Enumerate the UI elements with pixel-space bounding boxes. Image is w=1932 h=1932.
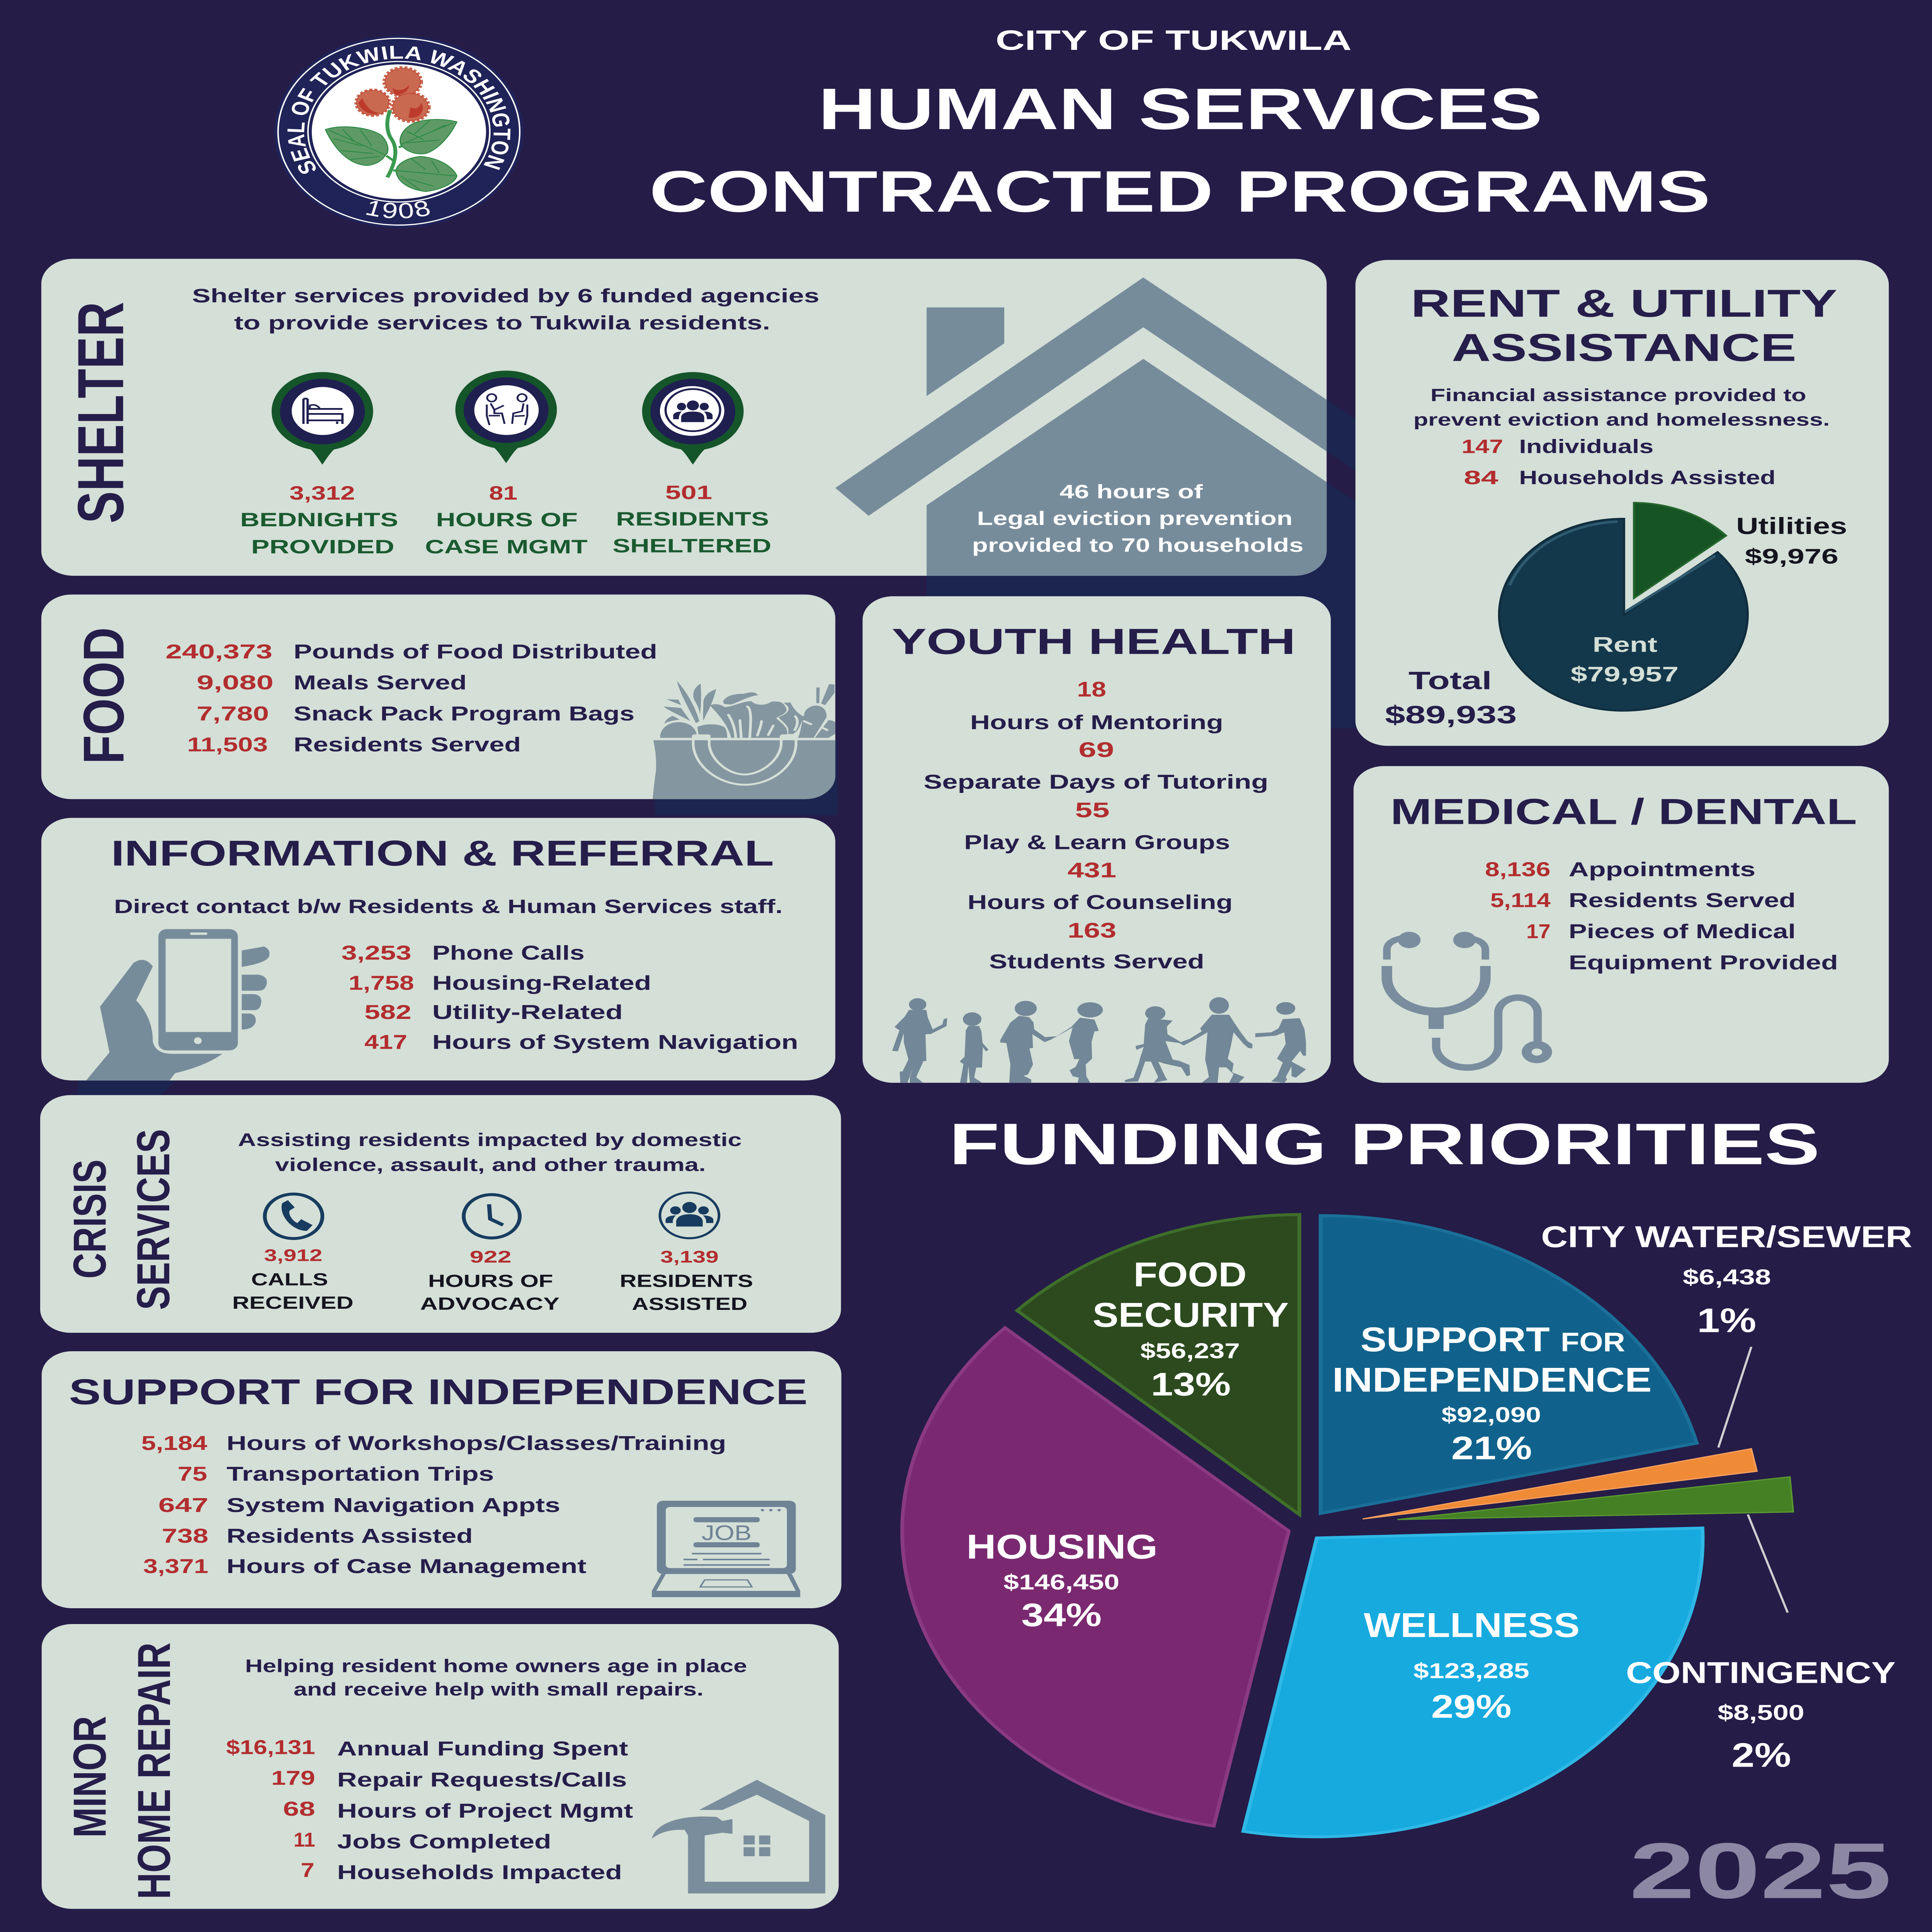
label: utilities: Utilities xyxy=(1736,513,1847,539)
rent intro text: Financial assistance provided to xyxy=(1430,385,1806,405)
slice: support for independence: 21% xyxy=(1451,1430,1532,1466)
stat: bednights: PROVIDED xyxy=(251,536,395,558)
heading: information and referral: INFORMATION & REFERRAL xyxy=(111,833,774,873)
icon: grocery bag xyxy=(653,681,835,799)
icon: house and hammer xyxy=(652,1780,825,1893)
icon: case management pin xyxy=(455,371,557,463)
food stats: 7,780 xyxy=(197,702,269,725)
medical stats: 17 xyxy=(1526,920,1551,942)
stat: residents assisted xyxy=(620,1247,753,1314)
youth health stats: Hours of Counseling xyxy=(968,891,1233,913)
label: city water and sewer: CITY WATER/SEWER xyxy=(1541,1220,1912,1254)
food stats xyxy=(165,640,657,756)
heading: medical and dental: MEDICAL / DENTAL xyxy=(1390,792,1857,832)
icon: residents group xyxy=(660,1192,719,1238)
label: total: $89,933 xyxy=(1385,701,1517,729)
support stats: Hours of Case Management xyxy=(226,1555,587,1577)
heading: funding priorities: FUNDING PRIORITIES xyxy=(949,1111,1820,1177)
medical stats: 5,114 xyxy=(1490,889,1551,912)
heading: crisis services: CRISIS xyxy=(64,1160,116,1279)
food stats: 9,080 xyxy=(197,671,274,694)
youth health stats: Separate Days of Tutoring xyxy=(923,770,1268,793)
minor repair stats: Hours of Project Mgmt xyxy=(337,1799,633,1822)
youth health stats: Hours of Mentoring xyxy=(970,711,1223,733)
crisis intro text xyxy=(238,1130,742,1175)
food stats: Snack Pack Program Bags xyxy=(294,702,634,725)
slice: housing: 34% xyxy=(1021,1596,1102,1633)
stat: residents sheltered xyxy=(612,482,771,557)
pie chart: rent and utilities: $79,957 xyxy=(1571,663,1679,686)
slice: food security: SECURITY xyxy=(1092,1295,1289,1334)
panel: information and referral xyxy=(41,818,835,1080)
minor repair intro text: Helping resident home owners age in place xyxy=(245,1656,747,1676)
information stats: 1,758 xyxy=(349,972,414,994)
medical stats xyxy=(1485,858,1838,974)
slice: support for independence xyxy=(1321,1216,1697,1514)
support stats: 3,371 xyxy=(143,1555,208,1577)
medical stats: Equipment Provided xyxy=(1569,951,1838,974)
heading: youth health: YOUTH HEALTH xyxy=(892,622,1296,662)
legal eviction callout: provided to 70 households xyxy=(972,535,1304,556)
heading: support for independence: SUPPORT FOR INDEPENDENCE xyxy=(69,1372,808,1412)
icon: clock xyxy=(464,1195,520,1238)
stat: calls received xyxy=(232,1246,354,1313)
slice: city water and sewer xyxy=(1362,1449,1757,1519)
icon: phone xyxy=(265,1194,322,1238)
slice: housing: $146,450 xyxy=(1003,1570,1119,1594)
support stats: System Navigation Appts xyxy=(226,1494,560,1516)
medical stats: Appointments xyxy=(1569,858,1755,881)
rent stats: Households Assisted xyxy=(1519,467,1776,488)
crisis intro text: violence, assault, and other trauma. xyxy=(275,1155,706,1175)
heading: crisis services: SERVICES xyxy=(128,1129,179,1310)
slice: food security: 13% xyxy=(1151,1366,1231,1403)
heading: food: FOOD xyxy=(71,627,136,764)
slice: wellness: WELLNESS xyxy=(1364,1605,1580,1644)
slice: housing xyxy=(902,1328,1289,1826)
minor repair intro text: and receive help with small repairs. xyxy=(294,1679,704,1699)
crisis intro text: Assisting residents impacted by domestic xyxy=(238,1130,742,1150)
label: total: Total xyxy=(1408,667,1492,694)
legal eviction callout: 46 hours of xyxy=(1060,481,1203,503)
minor repair stats xyxy=(226,1736,633,1883)
slice: food security xyxy=(1017,1214,1299,1515)
minor repair stats: 7 xyxy=(301,1859,315,1881)
icon: house xyxy=(835,277,1327,576)
slice: support for independence: SUPPORT FOR xyxy=(1361,1320,1625,1359)
medical stats: 8,136 xyxy=(1485,858,1551,881)
heading: minor home repair: HOME REPAIR xyxy=(128,1643,180,1899)
leader line: city water and sewer xyxy=(1718,1347,1751,1447)
slice: wellness: 29% xyxy=(1431,1688,1512,1725)
heading: minor home repair: MINOR xyxy=(64,1716,116,1838)
label: contingency: $8,500 xyxy=(1718,1700,1804,1725)
slice: food security: FOOD xyxy=(1133,1255,1247,1294)
stat: calls received: RECEIVED xyxy=(232,1293,354,1313)
panel: food xyxy=(41,595,835,799)
panel: medical and dental xyxy=(1354,766,1889,1083)
heading: rent and utility: ASSISTANCE xyxy=(1452,326,1796,369)
youth health stats: 163 xyxy=(1068,919,1116,942)
minor repair intro text xyxy=(245,1656,747,1699)
information stats: Housing-Related xyxy=(432,972,651,994)
slice: support for independence: $92,090 xyxy=(1441,1402,1541,1427)
panel: support for independence xyxy=(42,1351,841,1608)
stat: bednights: 3,312 xyxy=(289,483,355,504)
minor repair stats: 179 xyxy=(271,1767,315,1789)
minor repair stats: $16,131 xyxy=(226,1736,315,1759)
label: city water and sewer: $6,438 xyxy=(1683,1265,1771,1289)
stat: hours of advocacy xyxy=(420,1247,560,1314)
slice: housing: HOUSING xyxy=(966,1527,1158,1566)
information stats: Utility-Related xyxy=(432,1001,623,1023)
food stats: Residents Served xyxy=(294,733,521,756)
icon: laptop job xyxy=(652,1501,800,1597)
stat: residents assisted: ASSISTED xyxy=(632,1294,747,1314)
youth health stats: 69 xyxy=(1078,738,1114,762)
stat: residents assisted: 3,139 xyxy=(660,1247,719,1266)
stat: hours of advocacy: 922 xyxy=(470,1247,512,1266)
information stats xyxy=(341,942,798,1053)
minor repair stats: 68 xyxy=(283,1798,315,1820)
youth health stats: 431 xyxy=(1068,859,1116,882)
slice: food security: $56,237 xyxy=(1140,1338,1240,1363)
legal eviction callout xyxy=(972,481,1304,556)
title block: CITY OF TUKWILA xyxy=(995,25,1352,56)
panel: shelter xyxy=(41,259,1327,576)
slice: support for independence: INDEPENDENCE xyxy=(1332,1360,1652,1399)
stat: residents sheltered: 501 xyxy=(665,482,712,503)
minor repair stats: Jobs Completed xyxy=(337,1830,551,1853)
label: utilities xyxy=(1736,513,1847,568)
minor repair stats: 11 xyxy=(294,1828,315,1851)
information stats: Hours of System Navigation xyxy=(432,1031,798,1053)
label: contingency: CONTINGENCY xyxy=(1626,1656,1896,1690)
label: city water and sewer: 1% xyxy=(1697,1301,1756,1340)
slice: wellness: $123,285 xyxy=(1413,1658,1529,1683)
panel: rent and utility assistance xyxy=(1355,260,1889,746)
information intro text: Direct contact b/w Residents & Human Services staff. xyxy=(114,896,782,917)
icon: residents pin xyxy=(642,372,744,464)
title block: HUMAN SERVICES xyxy=(818,76,1543,142)
support stats: 647 xyxy=(158,1494,208,1516)
food stats: Meals Served xyxy=(294,671,467,694)
leader line: contingency xyxy=(1748,1515,1787,1612)
stat: calls received: CALLS xyxy=(251,1270,328,1289)
support stats: Residents Assisted xyxy=(226,1525,473,1547)
icon: bed pin xyxy=(272,372,373,464)
legal eviction callout: Legal eviction prevention xyxy=(977,508,1293,529)
shelter intro text: Shelter services provided by 6 funded agencies xyxy=(192,285,820,307)
stat: residents sheltered: RESIDENTS xyxy=(616,509,769,530)
support stats: 738 xyxy=(162,1525,208,1547)
rent stats xyxy=(1461,436,1776,488)
stat: calls received: 3,912 xyxy=(264,1246,322,1265)
stat: case management: 81 xyxy=(489,483,517,504)
panel: youth health xyxy=(862,596,1331,1083)
food stats: Pounds of Food Distributed xyxy=(294,640,657,663)
panel: crisis services xyxy=(40,1095,841,1333)
heading: crisis services xyxy=(64,1129,179,1310)
stat: residents assisted: RESIDENTS xyxy=(620,1271,753,1291)
label: contingency xyxy=(1626,1656,1896,1774)
icon: hand holding phone xyxy=(86,929,269,1080)
pie chart: rent and utilities: Rent xyxy=(1593,633,1657,656)
label: total xyxy=(1385,667,1517,729)
information stats: 3,253 xyxy=(341,942,412,964)
house shadow behind panels xyxy=(78,277,1364,1095)
rent stats: 84 xyxy=(1464,467,1498,488)
icon: children silhouettes xyxy=(892,997,1306,1083)
support stats: Transportation Trips xyxy=(226,1463,494,1485)
medical stats: Pieces of Medical xyxy=(1569,920,1796,942)
pie chart: rent and utilities xyxy=(1499,503,1748,711)
title block xyxy=(649,25,1710,224)
stat: residents sheltered: SHELTERED xyxy=(612,535,771,557)
youth health stats: Students Served xyxy=(989,950,1204,973)
stat: bednights: BEDNIGHTS xyxy=(240,509,398,531)
heading: rent and utility xyxy=(1411,282,1837,369)
information stats: 582 xyxy=(364,1001,412,1023)
stat: case management xyxy=(425,483,588,558)
slice: wellness xyxy=(1243,1528,1703,1837)
rent stats: 147 xyxy=(1461,436,1503,457)
stat: bednights xyxy=(240,483,398,558)
information stats: Phone Calls xyxy=(432,942,585,964)
seal: Tukwila xyxy=(274,36,524,228)
support stats: Hours of Workshops/Classes/Training xyxy=(226,1432,726,1454)
rent intro text xyxy=(1413,385,1830,430)
stat: hours of advocacy: HOURS OF xyxy=(428,1271,553,1291)
stat: case management: CASE MGMT xyxy=(425,536,588,558)
heading: minor home repair xyxy=(64,1643,180,1899)
information stats: 417 xyxy=(364,1031,407,1053)
label: city water and sewer xyxy=(1541,1220,1912,1340)
minor repair stats: Repair Requests/Calls xyxy=(337,1769,627,1791)
youth health stats xyxy=(923,678,1268,973)
heading: rent and utility: RENT & UTILITY xyxy=(1411,282,1837,325)
title block: CONTRACTED PROGRAMS xyxy=(649,159,1710,224)
minor repair stats: Households Impacted xyxy=(337,1861,622,1883)
seal: Tukwila: 1908 xyxy=(362,195,435,223)
heading: shelter: SHELTER xyxy=(64,302,137,524)
medical stats: Residents Served xyxy=(1569,889,1796,912)
pie chart: funding priorities xyxy=(902,1214,1793,1837)
icon: stethoscope xyxy=(1387,932,1547,1068)
stat: case management: HOURS OF xyxy=(436,509,578,531)
youth health stats: Play & Learn Groups xyxy=(964,831,1230,854)
support stats: 5,184 xyxy=(141,1432,207,1454)
food stats: 240,373 xyxy=(165,640,272,663)
shelter intro text: to provide services to Tukwila residents. xyxy=(234,312,770,334)
label: contingency: 2% xyxy=(1731,1736,1791,1774)
rent stats: Individuals xyxy=(1519,436,1653,457)
rent intro text: prevent eviction and homelessness. xyxy=(1413,410,1830,430)
label: year 2025: 2025 xyxy=(1629,1827,1891,1915)
support stats: 75 xyxy=(178,1463,207,1485)
label: utilities: $9,976 xyxy=(1745,545,1838,568)
food stats: 11,503 xyxy=(187,733,268,756)
icon: laptop job: JOB xyxy=(702,1521,752,1545)
youth health stats: 18 xyxy=(1077,678,1106,701)
youth health stats: 55 xyxy=(1075,799,1110,822)
minor repair stats: Annual Funding Spent xyxy=(337,1737,628,1760)
slice: contingency xyxy=(1398,1477,1793,1520)
stat: hours of advocacy: ADVOCACY xyxy=(420,1294,560,1314)
support stats xyxy=(141,1432,726,1577)
seal: Tukwila: SEAL OF TUKWILA WASHINGTON xyxy=(282,41,516,178)
panel: minor home repair xyxy=(42,1624,839,1909)
shelter intro text xyxy=(192,285,820,334)
